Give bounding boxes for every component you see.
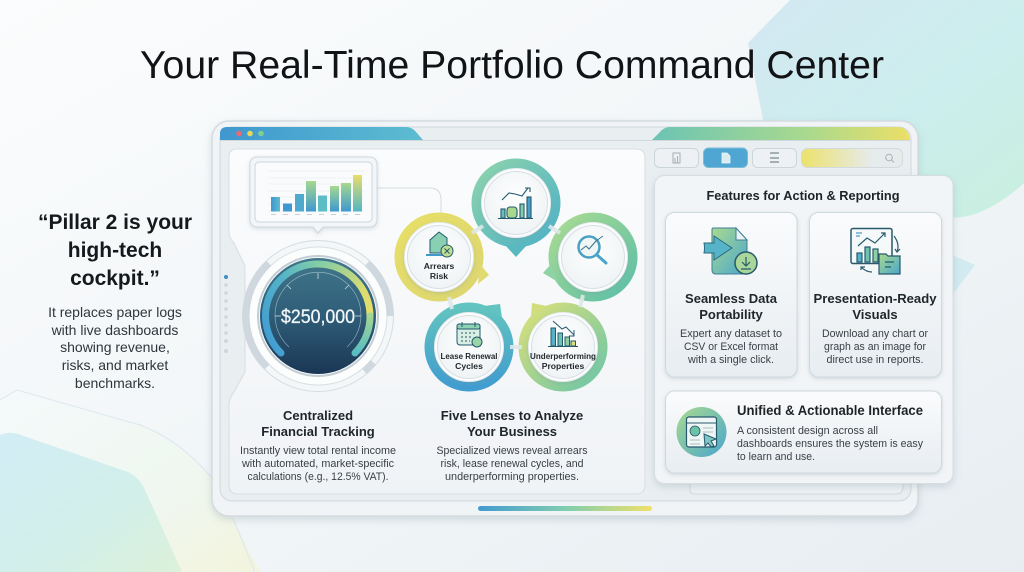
dashboard window [212,121,918,516]
card: seamless data portability: Portability [699,307,764,322]
icon: tab chart [673,153,680,163]
icon: data export [704,228,757,274]
icon: tab list [770,153,779,162]
quote description: It replaces paper logs [48,304,182,320]
panel heading: Features for Action & Reporting [706,188,900,203]
icon: house alert [426,232,453,257]
quote description: showing revenue, [60,339,170,355]
pull quote [38,211,192,290]
connector line [377,188,441,214]
card title: Presentation-Ready [814,291,937,306]
text: five lenses: Five Lenses to Analyze [441,408,583,423]
lens label: Lease Renewal [440,351,498,361]
toolbar tabs [654,148,902,168]
quote description: benchmarks. [75,375,155,391]
bottom strip [478,506,652,511]
pull quote: cockpit.” [70,267,160,290]
lens: arrears risk: Risk [430,271,448,281]
text: five lenses: Your Business [467,424,557,439]
icon: calendar [457,322,482,347]
side dots [224,275,228,353]
lens label: Arrears [424,261,455,271]
lens: market search [543,218,632,296]
window dots [236,131,264,136]
gauge arc [266,264,370,353]
card: unified and actionable interface [666,391,942,473]
lens label: Underperforming [530,351,596,361]
stacked panel edges [690,484,903,494]
lens: underperforming properties: Properties [542,361,584,371]
bar chart card [250,157,377,233]
pull quote: high-tech [68,239,162,262]
text: five lenses [436,408,588,483]
icon: search [886,154,894,162]
card: seamless data portability [666,212,797,377]
search bar [802,148,902,168]
icon: declining bars [548,321,578,346]
text: centralized financial tracking: Financial Tracking [261,424,375,439]
icon: tab document [722,153,730,163]
quote description: with live dashboards [51,322,178,338]
card title: Unified & Actionable Interface [737,403,923,418]
lens: underperforming properties [524,303,602,386]
card: unified and actionable interface: to learn and use. [737,451,815,463]
icon: growth chart [498,188,533,218]
card: seamless data portability: with a single click. [687,354,774,366]
card: unified and actionable interface: dashboards ensures the system is easy [737,438,923,450]
text: centralized financial tracking [240,408,396,483]
icon: chart and folder [851,228,900,274]
text: five lenses: underperforming properties. [445,471,579,483]
card: presentation-ready visuals: direct use in reports. [826,354,924,366]
text: centralized financial tracking: with automated, market-specific [241,458,394,470]
lens: arrears risk [400,218,489,296]
title: Your Real-Time Portfolio Command Center [140,44,884,87]
text: centralized financial tracking: Instantly view total rental income [240,445,396,457]
pull quote: “Pillar 2 is your [38,211,192,234]
card: presentation-ready visuals: graph as an image for [824,341,926,353]
card: seamless data portability: CSV or Excel format [684,341,778,353]
text: five lenses: Specialized views reveal arrears [436,445,588,457]
icon: interface [676,407,726,457]
card title: Seamless Data [685,291,778,306]
lens connectors [449,226,583,347]
text: five lenses: risk, lease renewal cycles, and [440,458,584,470]
panel: tracking and lenses [224,149,645,494]
card: presentation-ready visuals: Visuals [852,307,898,322]
lens: performance [476,164,556,257]
quote description: risks, and market [62,357,168,373]
lens: lease renewal cycles [430,304,508,386]
icon: magnifier [578,236,606,263]
left quote block [38,211,192,391]
card text: Download any chart or [822,328,928,340]
card: presentation-ready visuals [810,212,942,377]
panel: features for action and reporting [654,176,953,484]
text: centralized financial tracking: Centralized [283,408,353,423]
lens: lease renewal cycles: Cycles [455,361,483,371]
header bar left [220,127,423,140]
card text: Expert any dataset to [680,328,782,340]
header bar right [652,127,910,140]
quote description [48,304,182,391]
text: centralized financial tracking: calculations (e.g., 12.5% VAT). [248,471,388,483]
gauge value: $250,000 [281,307,355,328]
gauge [242,240,394,392]
card text: A consistent design across all [737,425,878,437]
